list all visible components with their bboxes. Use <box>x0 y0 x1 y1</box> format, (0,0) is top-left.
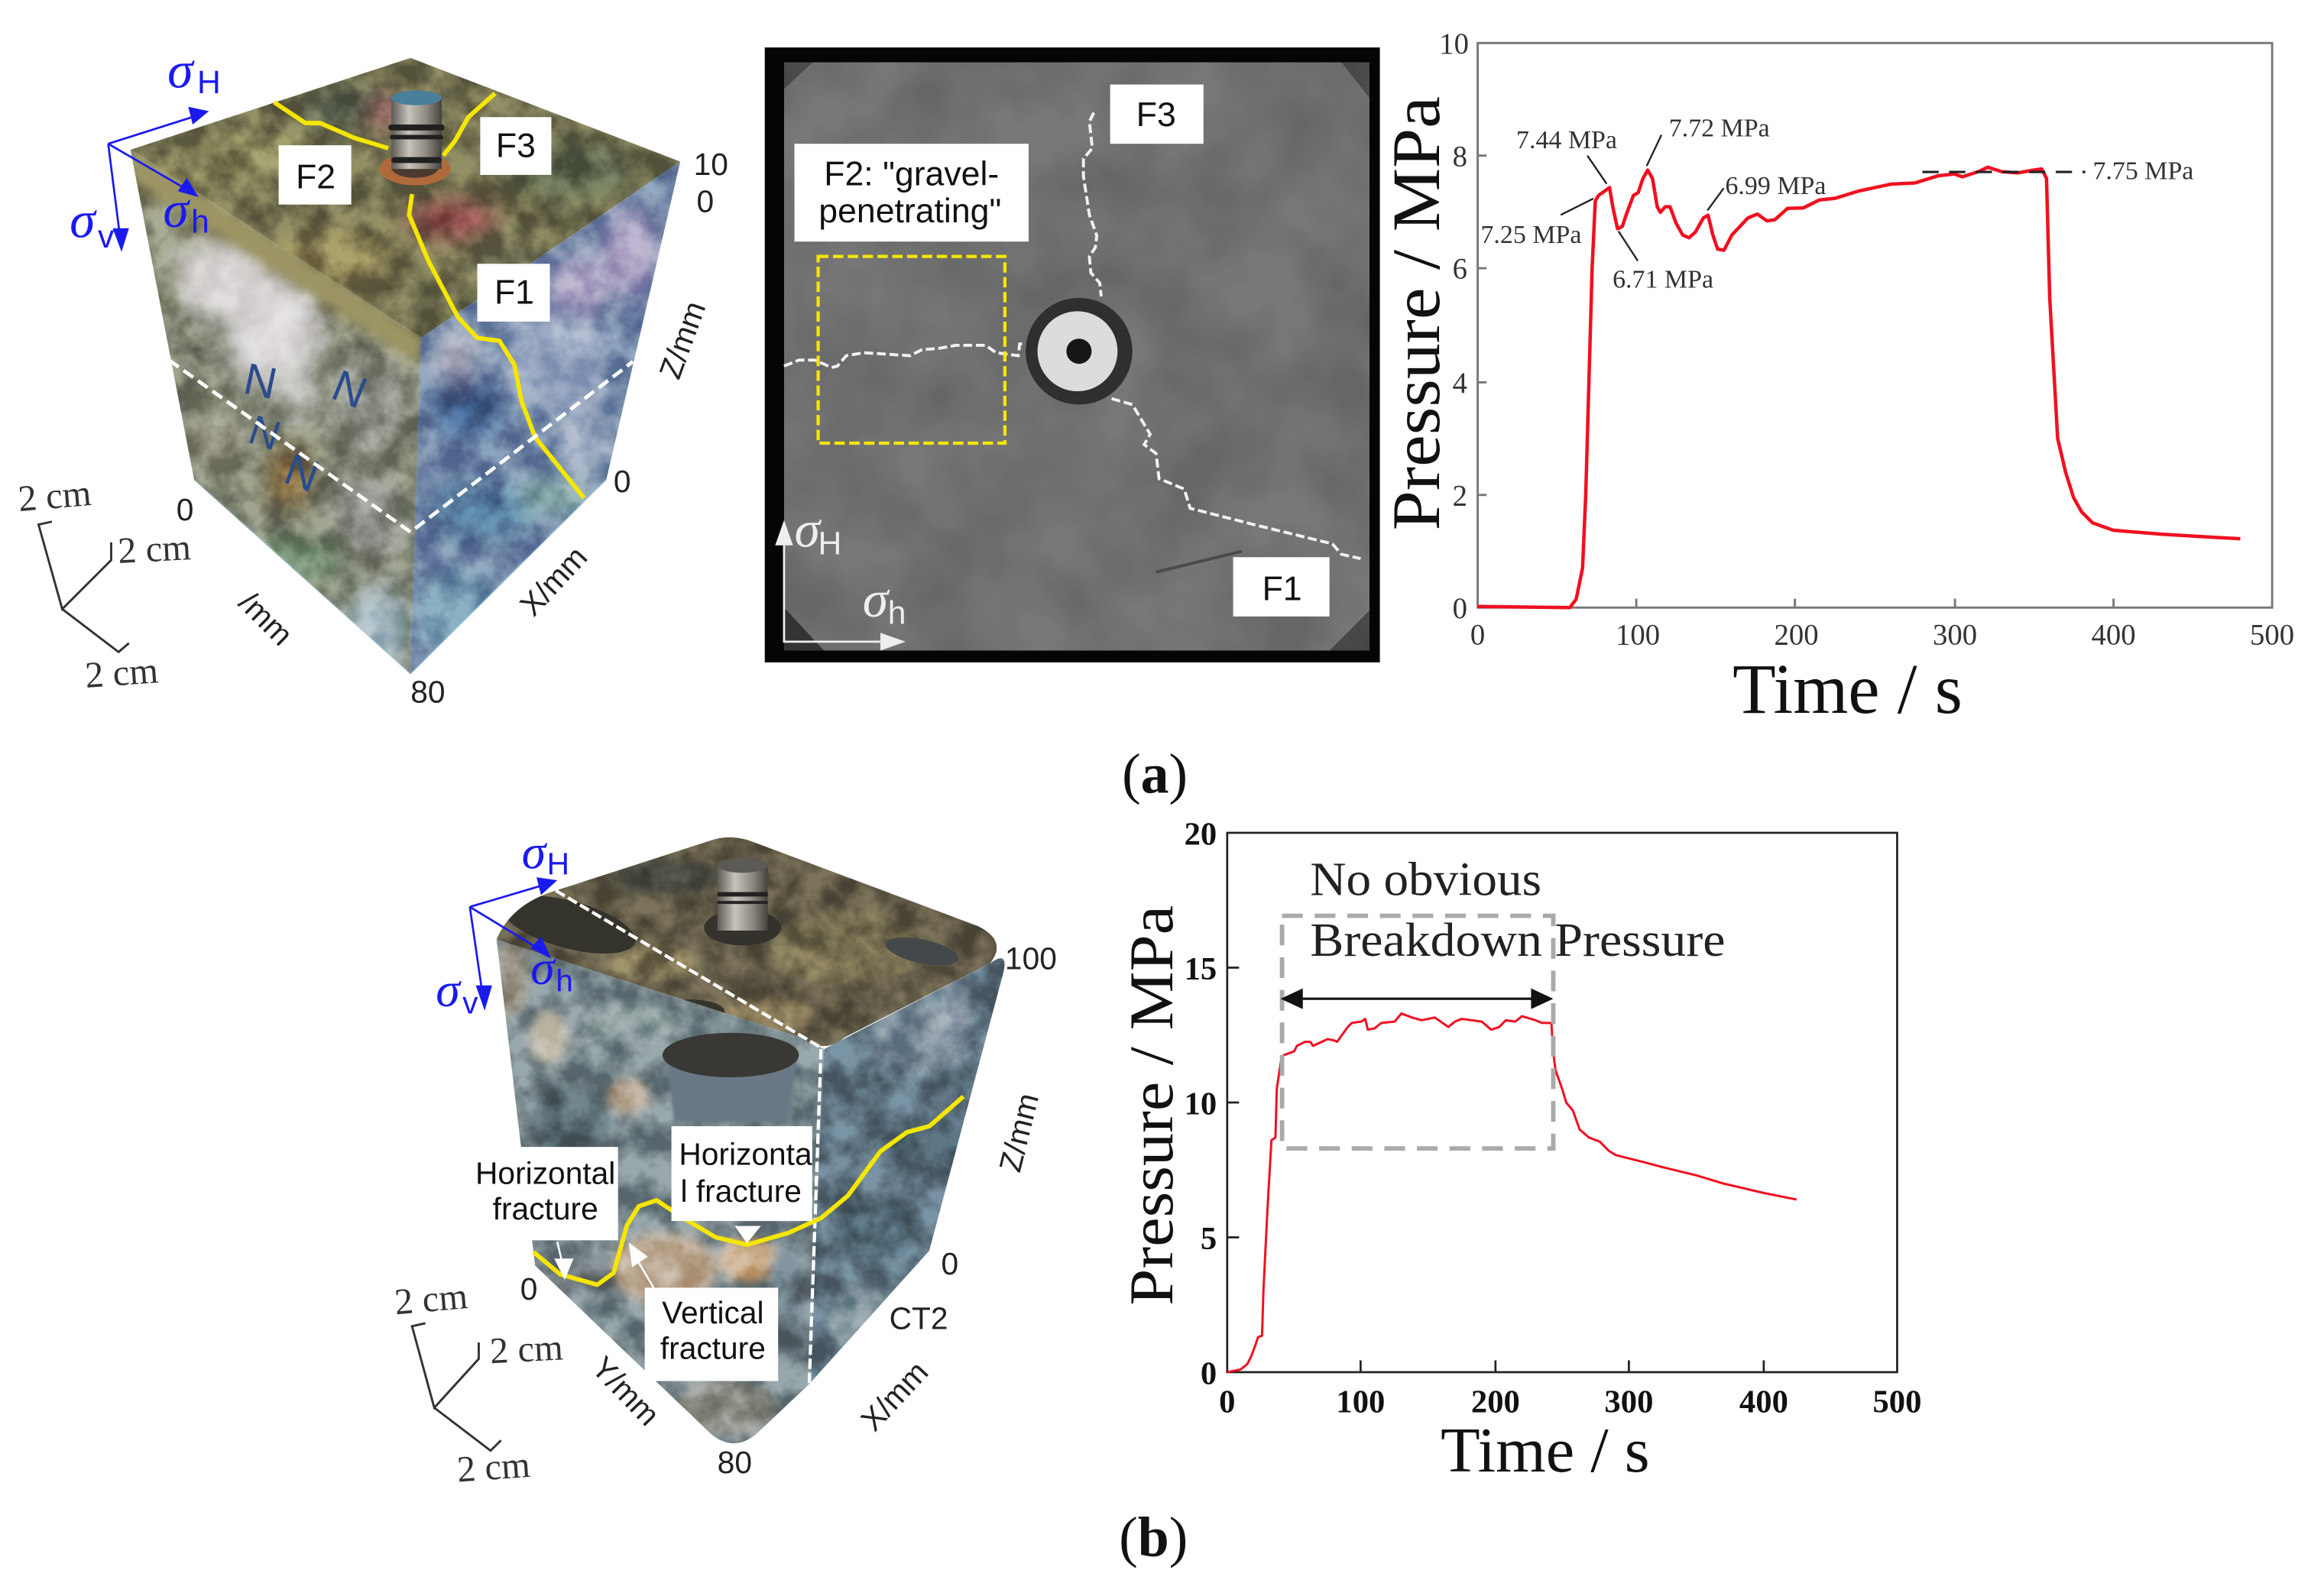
y tick labels: 10 <box>1439 28 1469 60</box>
annotations: 6.99 MPa <box>1725 172 1826 200</box>
stress axes: H <box>547 846 569 881</box>
plot frame and ticks <box>1227 833 1897 1372</box>
stress axes: σ <box>522 825 548 879</box>
x axis title: Time / s <box>1732 650 1963 729</box>
axis labels: 0 <box>614 464 631 499</box>
axis labels <box>177 147 728 709</box>
axis labels: 10 <box>694 147 728 182</box>
stress axes <box>436 825 573 1021</box>
chart: pressure vs time (a) <box>1379 28 2294 729</box>
tick labels: 500 <box>2250 619 2294 652</box>
label: horizontal fracture right: Horizonta <box>679 1136 812 1171</box>
x tick labels <box>1219 1384 1921 1420</box>
label F1 <box>477 264 550 322</box>
stress axes <box>70 41 221 255</box>
axis labels: Y/mm <box>585 1349 666 1433</box>
y tick labels: 5 <box>1201 1221 1217 1257</box>
y tick labels: 4 <box>1453 367 1467 400</box>
label F1 <box>1233 557 1330 617</box>
stress axes: v <box>98 219 115 255</box>
scale bar: 2 cm <box>117 527 192 571</box>
label: vertical fracture: Vertical <box>662 1295 764 1330</box>
dashed highlight box <box>1282 916 1554 1148</box>
y tick labels: 0 <box>1201 1355 1217 1391</box>
icon: injection pipe <box>704 858 781 945</box>
icon: injection pipe <box>379 90 451 185</box>
caption (a): (a) <box>1122 743 1188 805</box>
label: horizontal fracture left <box>462 1147 618 1240</box>
label: vertical fracture: fracture <box>660 1331 766 1366</box>
y tick labels: 8 <box>1453 140 1467 173</box>
stress axes: σ <box>436 963 462 1017</box>
stress axes: σ <box>167 41 195 99</box>
panel: specimen cube (a) <box>17 41 728 709</box>
x tick labels: 500 <box>1872 1384 1921 1420</box>
y tick labels: 10 <box>1185 1086 1217 1122</box>
marking: N letters: N <box>239 354 281 409</box>
marking: N letters <box>245 364 367 491</box>
label F1: F1 <box>1262 571 1302 608</box>
cube b left face <box>489 934 830 1452</box>
y tick labels: 2 <box>1453 479 1467 512</box>
stress axes: v <box>462 986 478 1021</box>
axis labels: 0 <box>942 1246 958 1281</box>
y axis title: Pressure / MPa <box>1379 96 1454 530</box>
annotations: 6.71 MPa <box>1613 265 1713 293</box>
stress axes: σ <box>70 191 97 248</box>
stress axes: h <box>888 595 906 632</box>
axis labels: 80 <box>410 674 446 709</box>
label F2 gravel-penetrating: penetrating" <box>818 193 1001 230</box>
label F1: F1 <box>494 274 534 312</box>
stress axes: σ <box>163 181 190 238</box>
stress axes: h <box>191 204 209 241</box>
label F2 gravel-penetrating <box>795 144 1029 241</box>
axis labels: X/mm <box>513 539 594 623</box>
y axis title: Pressure / MPa <box>1117 905 1186 1306</box>
cube a left face <box>130 150 421 674</box>
label F2 gravel-penetrating: F2: "gravel- <box>824 155 999 193</box>
x axis title: Time / s <box>1441 1416 1650 1486</box>
stress axes: σ <box>530 941 556 995</box>
tick labels <box>1470 619 2294 652</box>
axis labels: CT2 <box>890 1301 948 1336</box>
label F3 <box>480 117 551 175</box>
cube a top face <box>131 58 680 338</box>
fracture traces <box>274 93 584 498</box>
annotations: 7.25 MPa <box>1480 221 1581 249</box>
axis labels: 80 <box>718 1445 752 1480</box>
axis labels: X/mm <box>854 1354 935 1438</box>
stress axes: σ <box>863 571 890 628</box>
axis labels: 0 <box>520 1271 537 1306</box>
white callout arrows <box>556 1227 759 1287</box>
fracture trace <box>533 1096 964 1285</box>
highlighted gravel box <box>818 257 1005 443</box>
annotation text: Breakdown Pressure <box>1310 915 1725 966</box>
annotation text: No obvious <box>1310 853 1541 905</box>
annotations: 7.75 MPa <box>2092 157 2193 186</box>
panel: specimen cube (b) <box>393 825 1057 1490</box>
scale bar <box>17 473 192 696</box>
marking: N letters: N <box>326 361 374 419</box>
red pressure curve <box>1478 167 2241 607</box>
dashed section line <box>169 360 633 532</box>
fracture traces <box>784 112 1360 559</box>
marking: N letters: N <box>278 445 326 502</box>
label: vertical fracture <box>645 1287 778 1381</box>
marking: N letters: N <box>243 406 286 460</box>
double arrow <box>1281 989 1554 1009</box>
axis labels: /mm <box>232 584 300 652</box>
axis labels: 100 <box>1005 941 1057 976</box>
stress axes: σ <box>795 501 822 559</box>
chart: pressure vs time (b) <box>1117 817 1921 1486</box>
dashed section line <box>556 891 821 1384</box>
panel: CT slice (a) <box>765 47 1380 662</box>
label F3: F3 <box>496 128 536 165</box>
scale bar: 2 cm <box>489 1327 564 1371</box>
red pressure curve <box>1227 1014 1797 1372</box>
tick labels: 200 <box>1774 619 1819 652</box>
label F2: F2 <box>296 158 335 196</box>
x tick labels: 400 <box>1739 1384 1788 1420</box>
stress axes: H <box>818 525 841 562</box>
label F3: F3 <box>1136 96 1176 134</box>
y tick labels: 20 <box>1185 817 1217 853</box>
label: horizontal fracture left: Horizontal <box>475 1156 615 1191</box>
stress axes: H <box>197 64 221 101</box>
stress axes <box>775 501 906 650</box>
label: horizontal fracture right: l fracture <box>681 1174 802 1209</box>
x tick labels: 300 <box>1604 1384 1653 1420</box>
scale bar <box>393 1276 564 1490</box>
axis labels: 0 <box>697 183 714 219</box>
plot frame and ticks <box>1478 43 2272 607</box>
stress axes: h <box>556 963 573 999</box>
y tick labels <box>1439 28 1469 625</box>
tick labels: 400 <box>2092 619 2136 652</box>
label: horizontal fracture left: fracture <box>493 1191 598 1226</box>
x tick labels: 100 <box>1336 1384 1385 1420</box>
dark gravel on top face <box>498 884 961 1038</box>
annotations: 7.44 MPa <box>1516 126 1617 154</box>
cube a right face <box>410 162 680 674</box>
hexagonal gravel top <box>663 1033 799 1077</box>
y tick labels <box>1185 817 1217 1391</box>
tick labels: 300 <box>1933 619 1977 652</box>
axis labels: Z/mm <box>652 296 712 384</box>
y tick labels: 0 <box>1453 592 1467 625</box>
axis labels <box>520 941 1057 1480</box>
borehole <box>1026 298 1133 405</box>
annotations <box>1480 114 2193 293</box>
cube b right face <box>800 948 1015 1393</box>
y tick labels: 15 <box>1185 951 1217 987</box>
axis labels: Z/mm <box>992 1090 1045 1175</box>
tick labels: 0 <box>1470 619 1485 652</box>
cube b top face <box>489 830 1008 1067</box>
label F2 <box>279 145 352 205</box>
annotation text <box>1310 853 1725 966</box>
x tick labels: 200 <box>1471 1384 1520 1420</box>
scale bar: 2 cm <box>455 1445 531 1490</box>
annotations: 7.72 MPa <box>1669 114 1770 142</box>
scale bar: 2 cm <box>393 1276 469 1323</box>
label F3 <box>1110 85 1204 144</box>
tick labels: 100 <box>1616 619 1660 652</box>
hexagonal gravel side <box>666 1052 797 1122</box>
scale bar: 2 cm <box>84 650 160 696</box>
dark streak <box>1156 552 1242 572</box>
axis labels: 0 <box>177 492 193 527</box>
scale bar: 2 cm <box>17 473 92 520</box>
y tick labels: 6 <box>1453 253 1467 286</box>
x tick labels: 0 <box>1219 1384 1235 1420</box>
label: horizontal fracture right <box>672 1126 812 1221</box>
caption (b): (b) <box>1119 1505 1188 1568</box>
